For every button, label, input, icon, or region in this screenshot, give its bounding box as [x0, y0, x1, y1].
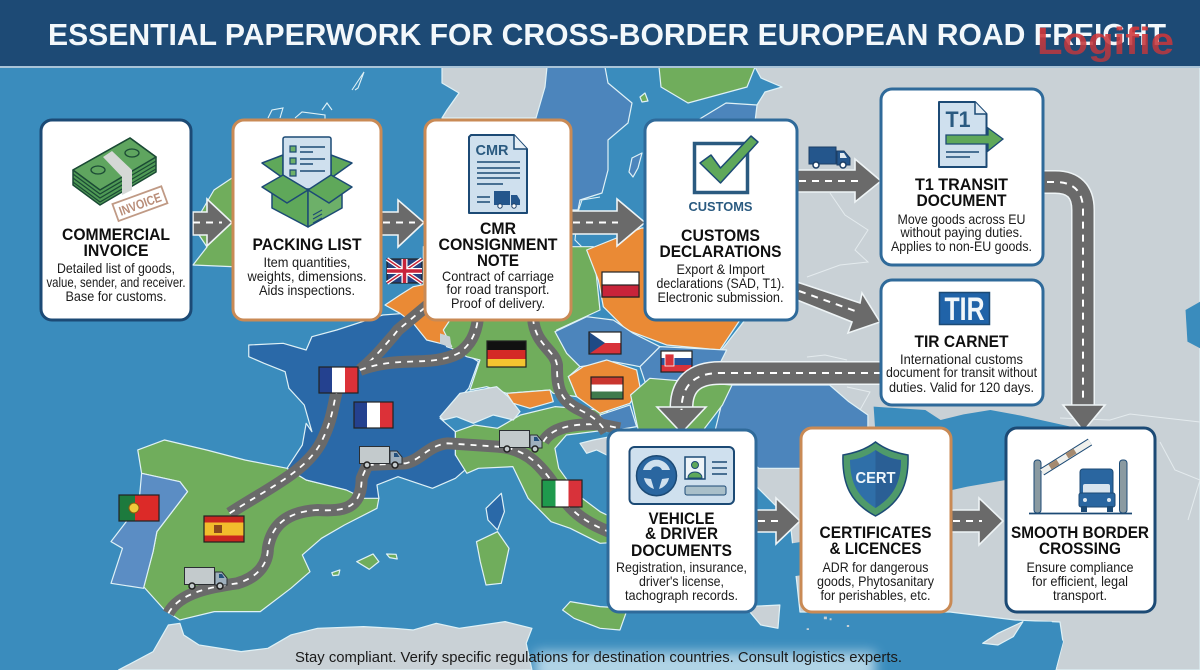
flag: Slovakia: [661, 351, 692, 372]
internal borders: eastern Europe: [807, 193, 1200, 520]
land: Romania: [631, 378, 732, 430]
panel: vehicle and driver documents: [608, 430, 756, 612]
description: Base for customs.: [66, 288, 166, 304]
heading: DOCUMENTS: [631, 541, 732, 560]
description: without paying duties.: [900, 224, 1022, 240]
heading: NOTE: [477, 251, 519, 270]
description: weights, dimensions.: [247, 268, 366, 284]
island: Sardinia: [476, 532, 509, 585]
description: value, sender, and receiver.: [46, 274, 186, 290]
sea: Black Sea: [874, 407, 1078, 498]
description: for efficient, legal: [1032, 573, 1128, 589]
heading: [820, 523, 932, 558]
icon: steering wheel and driver ID: [630, 447, 734, 504]
heading: CROSSING: [1039, 539, 1121, 558]
panel: CMR consignment note: [425, 120, 571, 320]
arrow: certificates to border crossing: [951, 498, 1003, 545]
heading: [438, 219, 558, 270]
land: Austria: [507, 390, 553, 408]
icon: CERT shield: CERT: [856, 470, 896, 487]
icon: stack of banknotes with invoice stamp: [73, 138, 167, 221]
heading: DOCUMENT: [916, 191, 1007, 210]
description: International customs: [900, 351, 1023, 367]
land: Finland: [659, 67, 755, 103]
land: UK: [193, 178, 240, 267]
icon: customs checkbox: CUSTOMS: [688, 199, 753, 214]
heading: & LICENCES: [830, 539, 922, 558]
description: tachograph records.: [625, 587, 738, 603]
description: [817, 559, 934, 603]
panel: customs declarations: [645, 120, 797, 320]
land: Hungary: [568, 360, 640, 413]
description: Aids inspections.: [259, 282, 355, 298]
description: [656, 261, 784, 305]
description: [616, 559, 747, 603]
flag: Germany: [487, 341, 526, 367]
flag: France north: [319, 367, 358, 393]
arrow: vehicle to certificates: [756, 498, 800, 544]
description: declarations (SAD, T1).: [656, 275, 784, 291]
islands: Balearics: [332, 554, 397, 576]
icon: open box with checklist: [262, 137, 352, 227]
arrow: customs to TIR: [797, 282, 880, 333]
description: [247, 254, 366, 298]
land: Baltics: [698, 103, 757, 122]
land: Czech Republic: [555, 317, 660, 367]
description: Electronic submission.: [658, 289, 784, 305]
description: document for transit without: [886, 364, 1037, 380]
description: for perishables, etc.: [820, 587, 930, 603]
flag: Spain: [204, 516, 244, 542]
description: [886, 351, 1037, 395]
description: Ensure compliance: [1026, 559, 1134, 575]
panel: smooth border crossing: [1006, 428, 1155, 612]
description: ADR for dangerous: [822, 559, 928, 575]
heading: SMOOTH BORDER: [1011, 523, 1149, 542]
icon: TIR badge: TIR: [944, 291, 984, 327]
title banner: ESSENTIAL PAPERWORK FOR CROSS-BORDER EUROPEAN ROAD FREIGHT: [48, 17, 1166, 52]
land: Portugal: [111, 473, 188, 588]
sea: Mediterranean: [753, 602, 1063, 670]
icon: customs checkbox: [688, 136, 758, 214]
heading: COMMERCIAL: [62, 225, 170, 244]
islands: Baltic: [629, 153, 642, 177]
description: goods, Phytosanitary: [817, 573, 934, 589]
description: Move goods across EU: [898, 211, 1026, 227]
logo watermark: Logifie: [1037, 21, 1174, 63]
heading: [1011, 523, 1149, 558]
land: Benelux: [385, 283, 452, 347]
arrow road: TIR to vehicle documents: [657, 373, 881, 433]
heading: INVOICE: [84, 241, 148, 260]
island: Cyprus: [983, 622, 1023, 645]
icon: T1 document with arrow: T1: [946, 107, 970, 132]
land: eastern Europe and Middle East: [713, 67, 1200, 670]
description: [1026, 559, 1134, 603]
heading: T1 TRANSIT: [915, 175, 1009, 194]
footer haze: [535, 652, 875, 670]
description: Detailed list of goods,: [57, 260, 175, 276]
truck on road: Italy: [500, 430, 542, 452]
description: [442, 268, 554, 311]
land: Switzerland: [440, 387, 520, 423]
icon: border barrier and truck: [1029, 442, 1132, 514]
heading: VEHICLE: [648, 509, 714, 528]
description: [46, 260, 186, 304]
arrow: invoice to packing list: [193, 199, 232, 246]
panel: certificates and licences: [801, 428, 951, 612]
heading: [660, 226, 782, 261]
flag: Italy: [542, 480, 582, 507]
panel: T1 transit document: [881, 89, 1043, 265]
sea: Aegean: [761, 542, 803, 578]
truck on road: France: [360, 446, 402, 468]
panel: commercial invoice: [41, 120, 191, 320]
island: small green: [640, 93, 648, 102]
flag: Czech Republic: [589, 332, 621, 354]
heading: [62, 225, 170, 260]
heading: CONSIGNMENT: [438, 235, 558, 254]
description: Export & Import: [676, 261, 765, 277]
land: Spain: [138, 440, 379, 620]
land: Slovakia: [640, 347, 727, 387]
heading: & DRIVER: [645, 524, 718, 543]
flag: Poland: [602, 272, 639, 297]
icon: CMR document: CMR: [476, 142, 509, 159]
land: Peloponnese: [745, 605, 780, 628]
land: Serbia: [600, 405, 637, 432]
arrow: customs to T1: [797, 159, 881, 202]
island: Sicily: [563, 602, 628, 630]
description: Registration, insurance,: [616, 559, 747, 575]
title banner: [0, 0, 1200, 68]
flag: Portugal: [119, 495, 159, 521]
flag: France south: [354, 402, 393, 428]
flag: Hungary: [591, 377, 623, 399]
heading: DECLARATIONS: [660, 242, 782, 261]
description: Item quantities,: [264, 254, 350, 270]
northern isles: [268, 72, 364, 120]
icon: T1 document with arrow: [939, 102, 1003, 167]
description: driver's license,: [639, 573, 724, 589]
arrow: CMR to customs: [571, 199, 645, 246]
description: transport.: [1053, 587, 1107, 603]
heading: CUSTOMS: [681, 226, 760, 245]
land: Poland: [587, 228, 747, 350]
heading: CERTIFICATES: [820, 523, 932, 542]
panel: TIR carnet: [881, 280, 1043, 405]
heading: TIR CARNET: [914, 332, 1009, 351]
description: Applies to non-EU goods.: [891, 238, 1032, 254]
heading: CMR: [480, 219, 516, 238]
heading: PACKING LIST: [252, 235, 362, 254]
truck on road: Spain: [184, 568, 227, 589]
description: Contract of carriage: [442, 268, 554, 284]
description: Proof of delivery.: [451, 295, 545, 311]
description: [891, 211, 1032, 254]
description: for road transport.: [446, 281, 550, 297]
land: Bulgaria blue region: [715, 385, 868, 468]
heading: [915, 175, 1009, 210]
description: duties. Valid for 120 days.: [889, 379, 1034, 395]
Denmark and Baltic coast outline: [575, 197, 600, 252]
land: Sweden: [477, 67, 632, 210]
land: North Africa: [119, 622, 532, 670]
icon: CMR document: [469, 135, 527, 213]
heading: [631, 509, 732, 560]
land: Italy: [455, 407, 628, 543]
icon: stack of banknotes with invoice stamp: INVOICE: [117, 189, 164, 219]
islands: Aegean dots: [807, 617, 849, 630]
island: Corsica: [486, 493, 504, 530]
panel: packing list: [233, 120, 381, 320]
arrow: packing list to CMR: [381, 200, 424, 247]
land: Luxembourg: [440, 333, 452, 348]
land: Croatia coast: [580, 437, 610, 457]
icon: blue delivery truck: [809, 147, 850, 168]
map roads: [168, 305, 628, 613]
land: Norway: [442, 67, 547, 118]
land: Germany: [423, 247, 600, 397]
icon: CERT shield: [843, 442, 908, 516]
arrow road: T1 to smooth border crossing: [1043, 182, 1105, 431]
flag: United Kingdom: [387, 259, 422, 283]
footer note: Stay compliant. Verify specific regulations for destination countries. Consult logistics experts.: [295, 649, 902, 666]
land: France: [249, 313, 478, 498]
sea: Caspian: [1186, 302, 1200, 348]
